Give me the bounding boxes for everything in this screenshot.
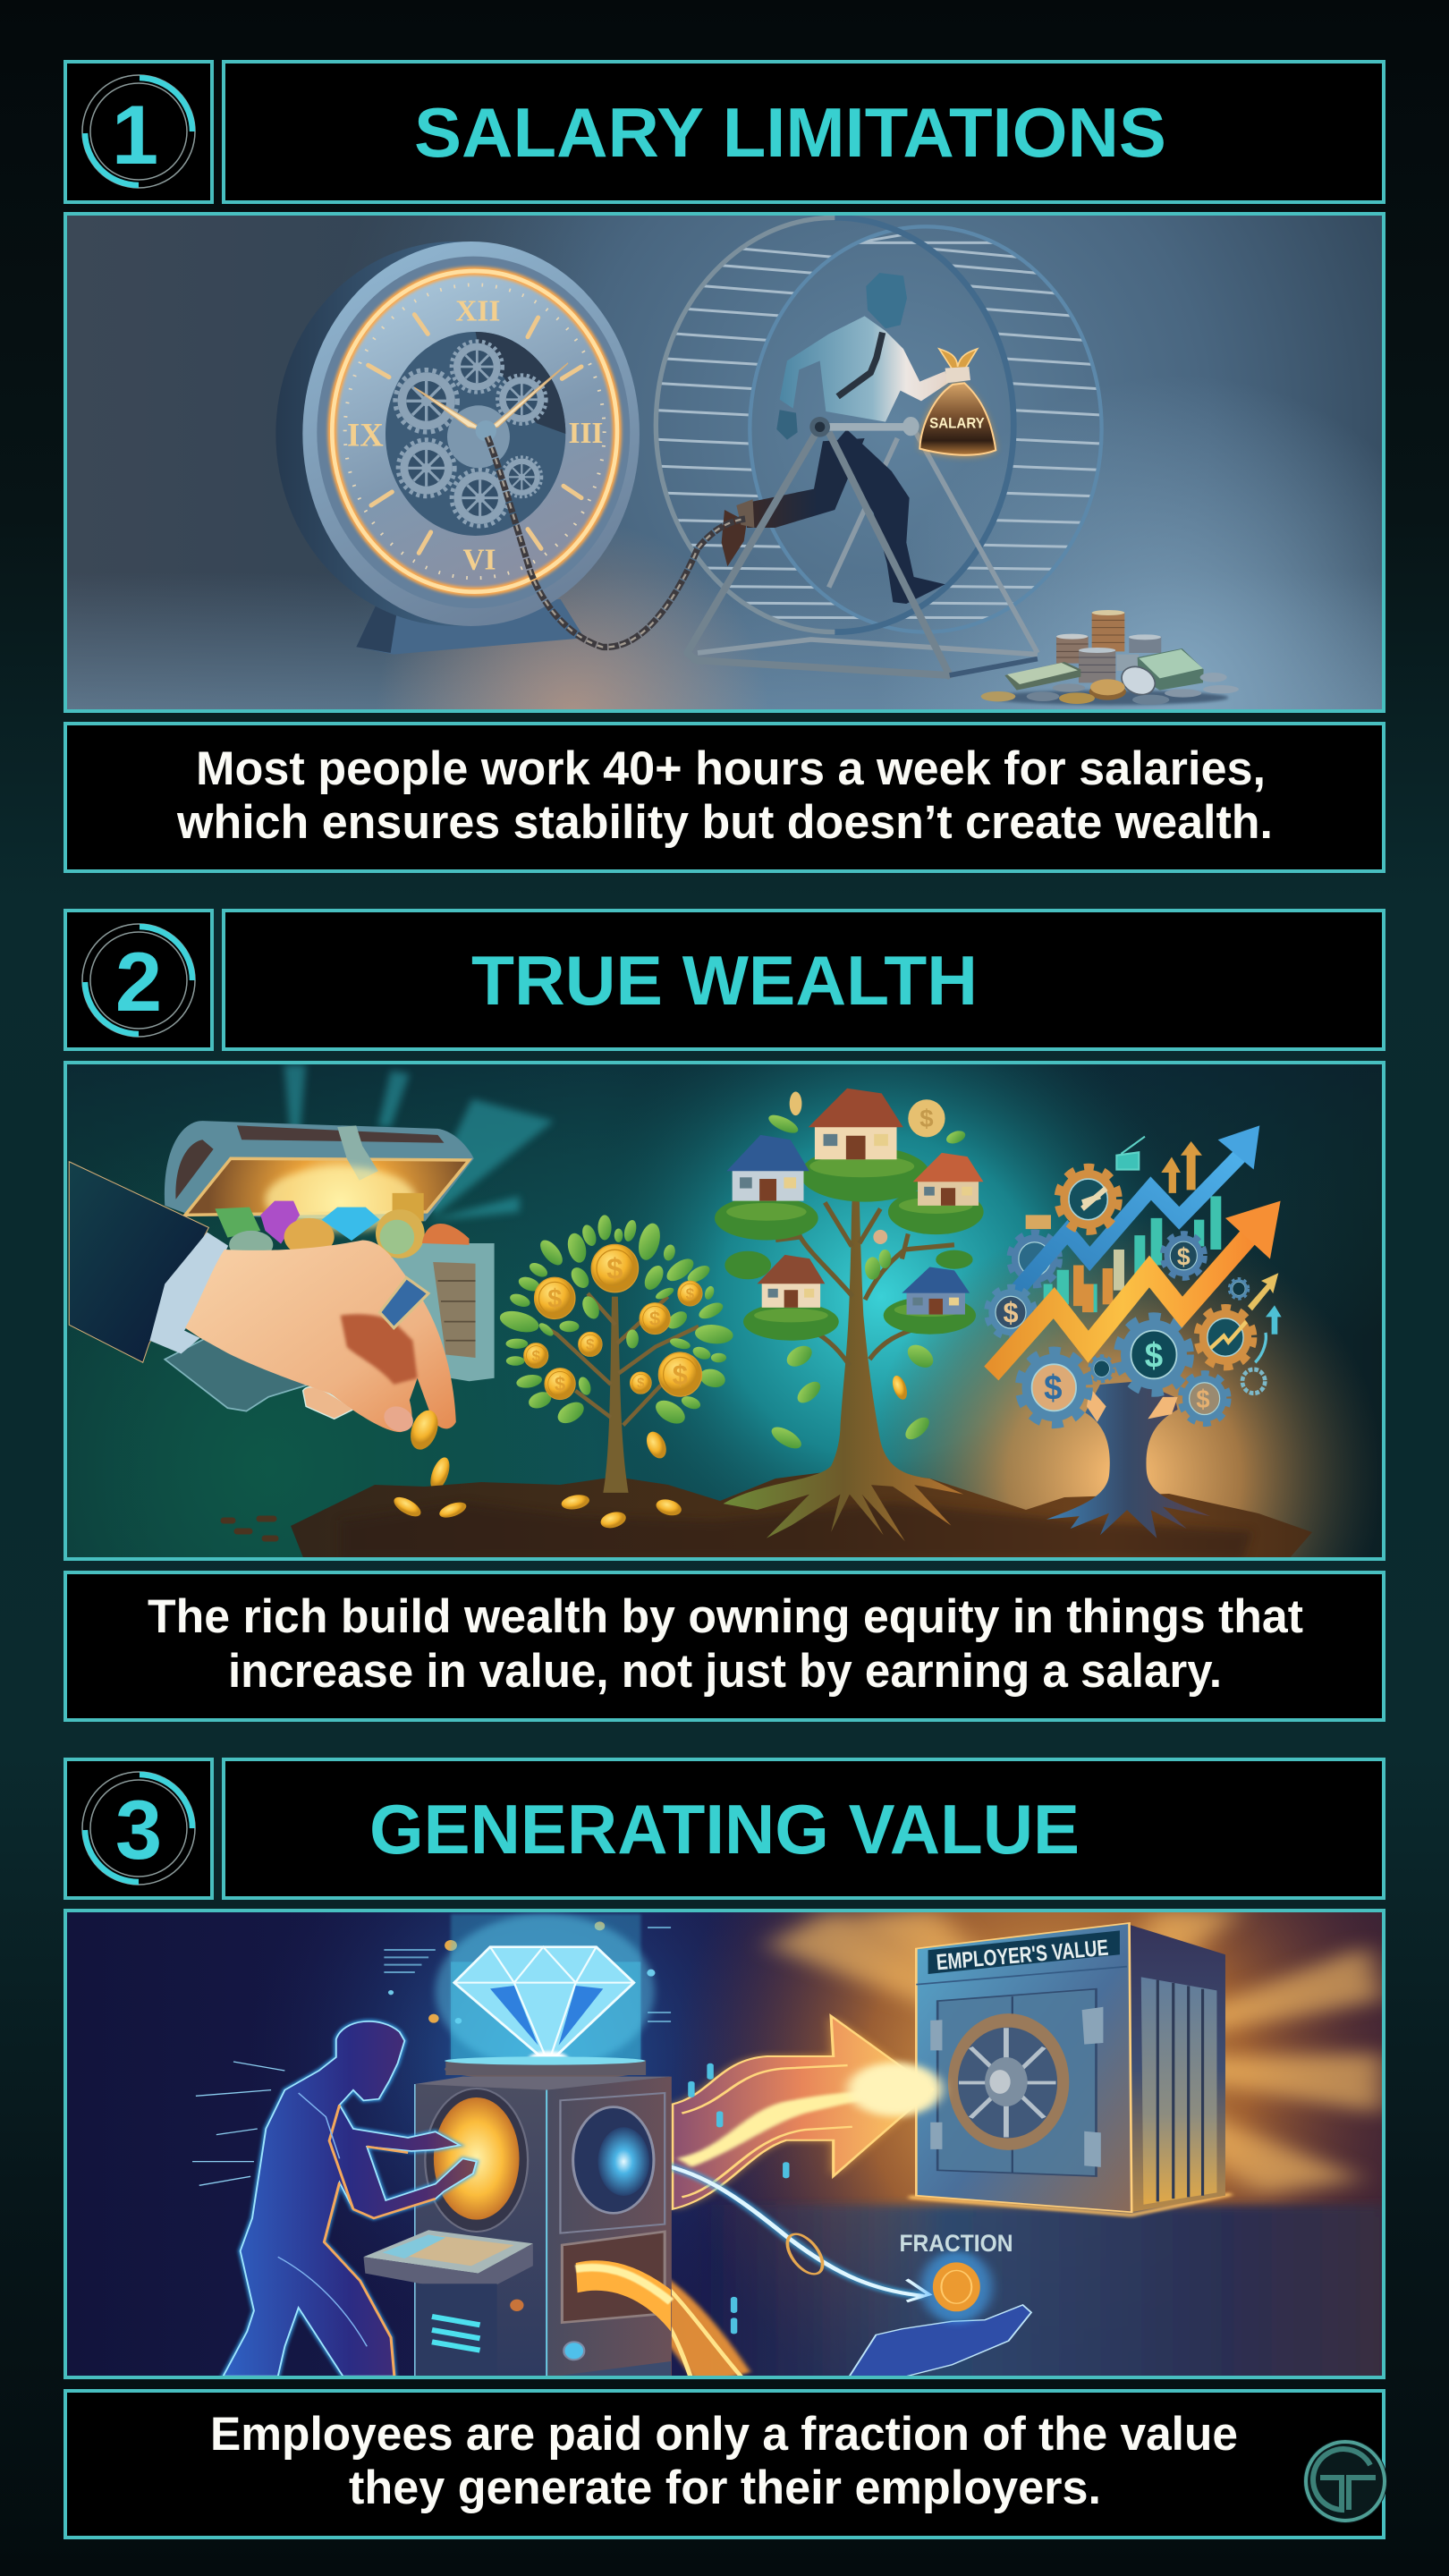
icon: house tree: $ bbox=[919, 1105, 934, 1132]
image frame 1 bbox=[65, 214, 1384, 711]
icon: investment tree with gears and arrows bbox=[987, 1125, 1282, 1538]
image frame 2 bbox=[65, 1063, 1384, 1559]
icon: safe labelled employer's value bbox=[909, 1923, 1231, 2215]
icon: glass column and diamond bbox=[436, 1914, 655, 2069]
heading: generating value: GENERATING VALUE bbox=[369, 1790, 1080, 1868]
label: fraction: FRACTION bbox=[900, 2230, 1013, 2257]
number badge 2 bbox=[65, 911, 212, 1049]
number badge 3: 3 bbox=[115, 1783, 162, 1877]
illustration: employee machine, vault and fraction coin bbox=[64, 1910, 1404, 2393]
section 2: true wealth bbox=[64, 911, 1385, 1720]
caption 3: they generate for their employers. bbox=[349, 2462, 1101, 2514]
floor under vault bbox=[698, 2205, 1404, 2393]
icon: coin tree: $ bbox=[555, 1373, 566, 1395]
caption 3 bbox=[65, 2391, 1384, 2538]
icon: blue stream to fraction coin bbox=[644, 2065, 929, 2332]
icon: hand dropping coin bbox=[69, 1162, 456, 1493]
icon: hamster wheel bbox=[656, 217, 1102, 678]
icon: fraction coin bbox=[921, 2251, 992, 2323]
icon: coin tree: $ bbox=[686, 1284, 695, 1302]
soil ground bbox=[224, 1469, 1312, 1560]
icon: salary bag bbox=[919, 349, 996, 456]
icon: salary bag: SALARY bbox=[929, 415, 985, 432]
caption 2 bbox=[65, 1572, 1384, 1720]
icon: coin tree: $ bbox=[673, 1360, 688, 1391]
icon: investment tree with gears and arrows: $ bbox=[1145, 1336, 1163, 1375]
heading: generating value bbox=[224, 1759, 1384, 1898]
caption 1 bbox=[65, 724, 1384, 871]
icon: coin tree bbox=[497, 1215, 733, 1530]
section 3: generating value bbox=[64, 1759, 1404, 2538]
icon: clock with gears: III bbox=[569, 417, 603, 450]
icon: investment tree with gears and arrows: $ bbox=[1003, 1297, 1019, 1329]
icon: man running bbox=[722, 273, 948, 604]
heading: salary limitations bbox=[224, 62, 1384, 202]
number badge 1: 1 bbox=[112, 88, 158, 182]
icon: clock with gears bbox=[275, 242, 640, 655]
wheel back stand bbox=[698, 427, 1038, 655]
icon: coin tree: $ bbox=[606, 1252, 623, 1285]
icon: coin tree: $ bbox=[547, 1285, 562, 1314]
label: employer's value: EMPLOYER'S VALUE bbox=[936, 1936, 1109, 1975]
number badge 2: 2 bbox=[115, 935, 162, 1029]
caption 1: which ensures stability but doesn’t create wealth. bbox=[176, 796, 1273, 849]
icon: coin tree: $ bbox=[586, 1335, 595, 1353]
icon: coin tree: $ bbox=[649, 1308, 661, 1330]
icon: clock with gears: IX bbox=[347, 416, 384, 453]
number badge 3 bbox=[65, 1759, 212, 1898]
number badge 1 bbox=[65, 62, 212, 202]
heading: true wealth bbox=[224, 911, 1384, 1049]
icon: investment tree with gears and arrows: $ bbox=[1044, 1368, 1063, 1407]
icon: clock with gears: XII bbox=[455, 294, 500, 327]
icon: treasure chest bbox=[165, 1064, 554, 1411]
icon: lower energy stream bbox=[615, 2269, 743, 2379]
icon: employee figure bbox=[192, 2021, 477, 2377]
icon: control panels and holographic readouts bbox=[384, 1921, 671, 2024]
icon: value machine bbox=[363, 2056, 672, 2379]
logo badge bbox=[1303, 2439, 1387, 2523]
heading: salary limitations: SALARY LIMITATIONS bbox=[414, 93, 1166, 172]
icon: clock with gears: VI bbox=[462, 544, 496, 577]
icon: coins and cash pile bbox=[981, 610, 1239, 705]
caption 2: increase in value, not just by earning a salary. bbox=[228, 1645, 1222, 1698]
caption 3: Employees are paid only a fraction of the value bbox=[210, 2408, 1238, 2461]
icon: open hand bbox=[848, 2305, 1031, 2379]
illustration: seeds growing into wealth trees bbox=[64, 1062, 1385, 1560]
section 1: salary limitations bbox=[64, 62, 1385, 871]
icon: investment tree with gears and arrows: $ bbox=[1177, 1242, 1191, 1271]
wheel front stand bbox=[687, 417, 1038, 678]
burst rays behind safe bbox=[767, 1910, 1383, 2194]
heading: true wealth: TRUE WEALTH bbox=[471, 941, 978, 1020]
icon: glowing orange arrow to safe bbox=[673, 2016, 942, 2209]
illustration: clock chained to hamster wheel bbox=[64, 213, 1385, 712]
icon: chain from clock to ankle bbox=[487, 436, 745, 647]
image frame 3 bbox=[65, 1911, 1384, 2377]
icon: coin tree: $ bbox=[637, 1377, 645, 1392]
caption 2: The rich build wealth by owning equity in things that bbox=[148, 1590, 1303, 1643]
caption 1: Most people work 40+ hours a week for salaries, bbox=[196, 742, 1266, 795]
icon: house tree bbox=[715, 1089, 984, 1541]
icon: coin tree: $ bbox=[531, 1347, 540, 1365]
icon: investment tree with gears and arrows: $ bbox=[1196, 1385, 1210, 1413]
